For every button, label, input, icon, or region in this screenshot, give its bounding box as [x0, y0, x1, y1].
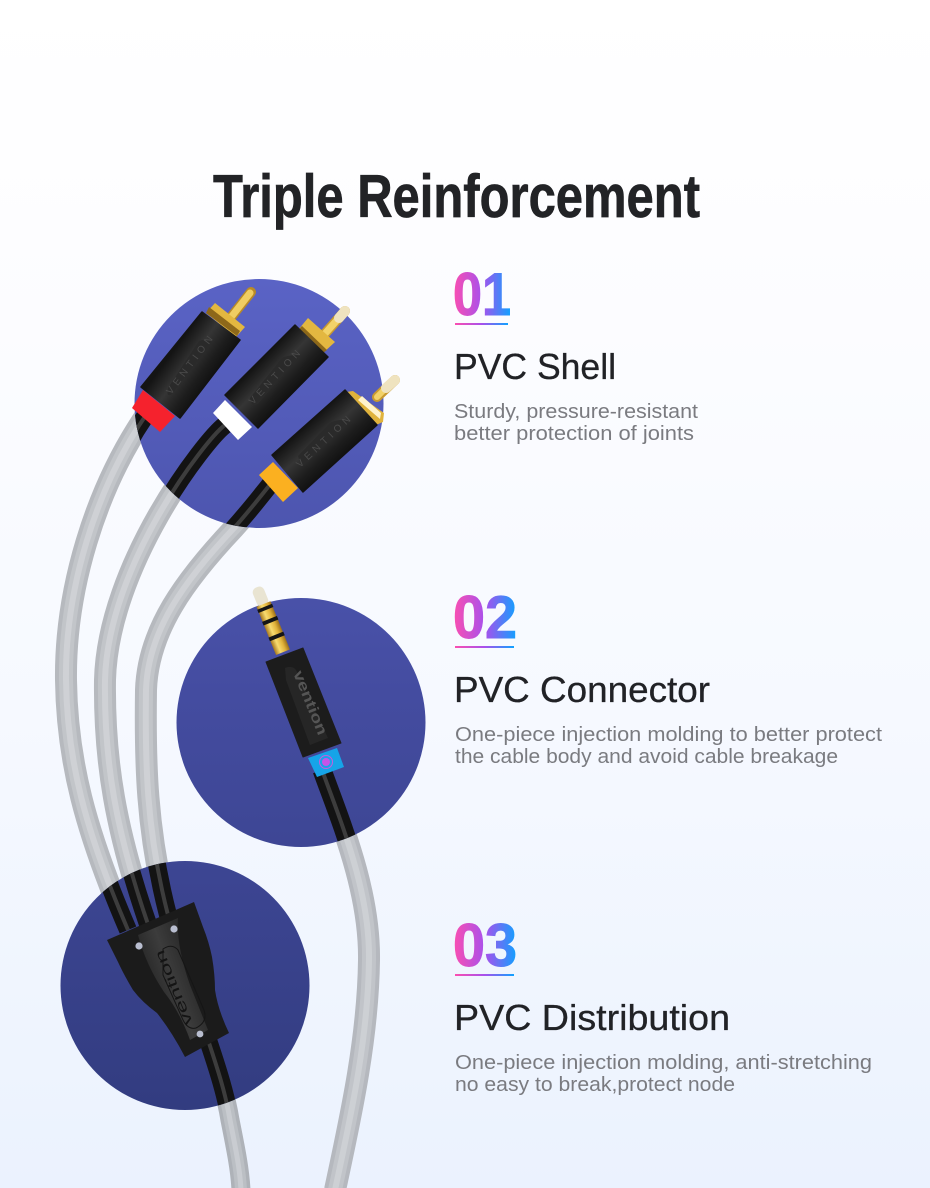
heading: PVC Shell: PVC Shell	[454, 346, 616, 387]
blue disc: audio jack	[176, 598, 426, 847]
section 03	[453, 912, 872, 1096]
audio jack plug	[249, 584, 344, 777]
number 03: 03	[453, 912, 517, 979]
white RCA plug: VENTION	[247, 348, 303, 407]
splitter junction: vention	[151, 948, 196, 1028]
blue disc: RCA plugs	[134, 279, 384, 528]
gray cables outside the discs	[66, 415, 369, 1188]
rivets	[135, 925, 203, 1037]
red RCA plug	[132, 292, 251, 432]
description 02: One-piece injection molding to better protect	[455, 724, 882, 746]
black cables inside the discs	[102, 412, 356, 1106]
blue disc: splitter	[60, 861, 310, 1110]
white RCA plug	[213, 311, 345, 440]
yellow RCA plug	[259, 380, 395, 502]
splitter junction	[107, 902, 229, 1057]
description 03: no easy to break,protect node	[455, 1074, 735, 1096]
description 01: Sturdy, pressure-resistant	[454, 401, 698, 423]
description 01	[454, 401, 698, 445]
description 02	[455, 724, 882, 768]
heading: PVC Distribution: PVC Distribution	[454, 997, 730, 1038]
audio jack plug: vention	[289, 668, 331, 738]
yellow RCA plug: VENTION	[295, 414, 353, 470]
description 01: better protection of joints	[454, 423, 694, 445]
description 03: One-piece injection molding, anti-stretching	[455, 1052, 872, 1074]
red RCA plug: VENTION	[165, 334, 216, 397]
number 01: 01	[453, 261, 511, 328]
description 02: the cable body and avoid cable breakage	[455, 746, 838, 768]
heading: PVC Connector: PVC Connector	[454, 669, 710, 710]
section 01	[453, 261, 698, 445]
title: Triple Reinforcement	[213, 163, 700, 230]
section 02	[453, 584, 882, 768]
description 03	[455, 1052, 872, 1096]
number 02: 02	[453, 584, 517, 651]
